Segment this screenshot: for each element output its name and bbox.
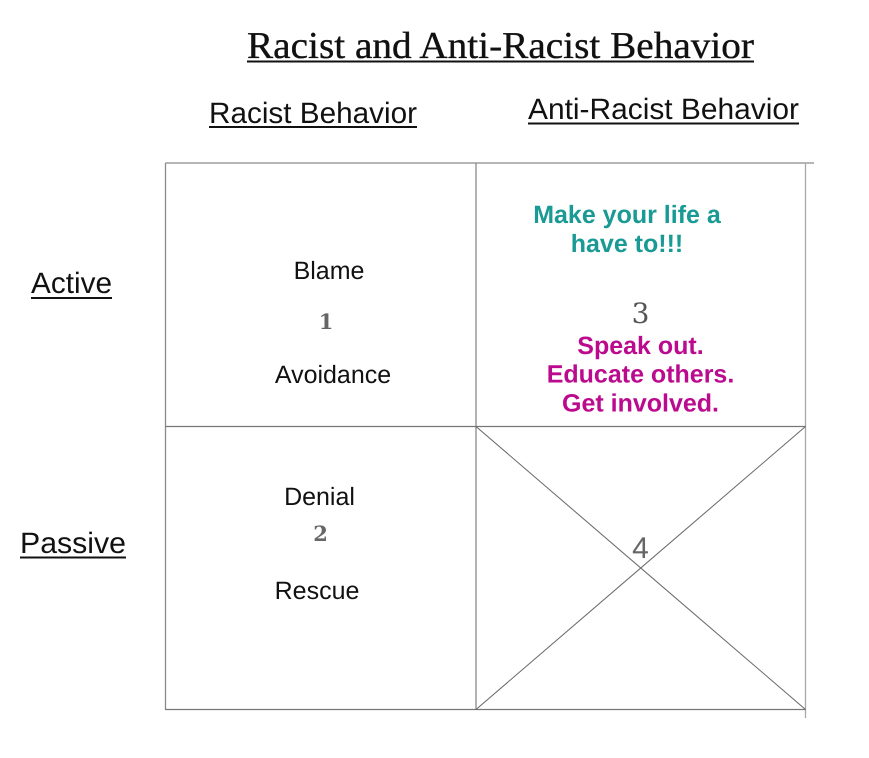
quadrant 3: active anti-racist behavior: 3 [632,297,649,330]
quadrant 3: active anti-racist behavior [533,201,734,418]
quadrant 2: passive racist behavior [275,483,359,605]
quadrant 1: active racist behavior: 1 [319,309,333,334]
quadrant 3: active anti-racist behavior: have to!!! [571,230,683,258]
row label: active: Active [31,267,112,300]
heading: racist behavior column: Racist Behavior [209,97,417,130]
matrix grid [166,163,814,718]
quadrant 3: active anti-racist behavior: Speak out. [577,332,704,360]
quadrant 3: active anti-racist behavior: Educate others. [547,360,734,388]
heading: anti-racist behavior column: Anti-Racist Behavior [528,93,799,126]
quadrant 4: crossed-out passive anti-racist behavior [476,426,806,710]
quadrant 2: passive racist behavior: Rescue [275,577,359,605]
quadrant 1: active racist behavior: Avoidance [275,361,391,389]
quadrant 2: passive racist behavior: Denial [284,483,355,511]
quadrant 3: active anti-racist behavior: Get involved. [562,390,719,418]
quadrant 3: active anti-racist behavior: Make your life a [533,201,722,229]
row label: passive: Passive [20,527,126,560]
title: Racist and Anti-Racist Behavior [247,25,754,67]
quadrant 1: active racist behavior: Blame [294,257,364,285]
quadrant 1: active racist behavior [275,257,391,389]
quadrant 4: crossed-out passive anti-racist behavior: 4 [632,532,649,565]
quadrant 2: passive racist behavior: 2 [313,521,328,546]
